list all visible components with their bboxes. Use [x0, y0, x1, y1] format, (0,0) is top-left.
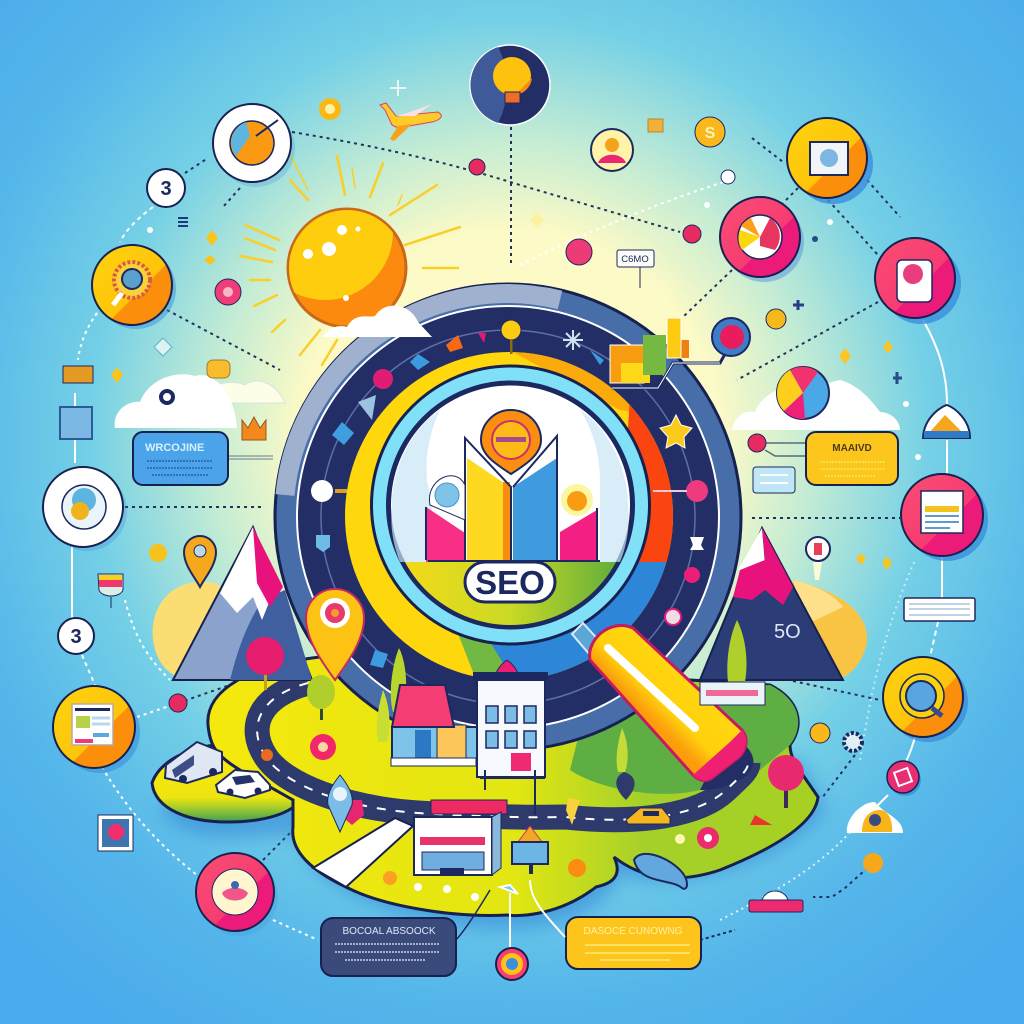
icon: globe circle — [43, 467, 127, 551]
icon: magnifier circle right — [883, 657, 968, 742]
white bar — [904, 598, 975, 621]
mountain right — [700, 528, 843, 680]
large yellow pin — [306, 589, 364, 680]
road end — [700, 745, 753, 790]
connector lines — [125, 127, 900, 897]
crown icon — [242, 417, 266, 440]
label: C6MO: C6MO — [621, 254, 649, 265]
tree lime left — [307, 675, 335, 720]
body — [414, 817, 492, 875]
store floor — [391, 758, 476, 766]
tower — [477, 680, 545, 777]
icon: pie circle — [720, 197, 804, 282]
tree pink left — [246, 637, 284, 690]
lens scene — [405, 409, 616, 625]
icon: card circle — [875, 238, 961, 324]
green shade — [570, 685, 798, 794]
road — [257, 683, 748, 820]
pink sign — [431, 800, 507, 814]
callout: navy — [321, 918, 456, 976]
lens outer — [372, 366, 650, 644]
flowers and road markers — [261, 734, 772, 901]
central tall building — [473, 660, 548, 815]
cloud under sun — [323, 306, 432, 337]
left cloud — [115, 360, 285, 428]
right cloud — [732, 380, 900, 430]
roof spire — [495, 660, 519, 680]
handle neck — [572, 623, 603, 655]
icon: coin S — [695, 117, 725, 147]
banner — [420, 837, 485, 845]
disc right pale — [793, 580, 843, 625]
yellow page — [467, 458, 503, 560]
callout: navy: BOCOAL ABSOOCK — [342, 926, 436, 937]
lower store — [414, 800, 507, 875]
store door — [415, 730, 431, 762]
pin on books — [481, 410, 541, 474]
store with awning — [391, 685, 477, 766]
trees — [246, 620, 804, 808]
orange stripe — [503, 482, 510, 560]
main island — [208, 657, 818, 916]
icon: coin S: S — [705, 125, 716, 142]
pin dash — [496, 437, 526, 442]
number badge 3 top: 3 — [160, 178, 172, 200]
shop windows — [422, 852, 484, 870]
small speech box — [748, 434, 795, 493]
lens rim — [388, 383, 632, 627]
door — [511, 753, 531, 771]
pink bar right — [560, 510, 597, 562]
icon: person badge — [591, 129, 633, 171]
small dome cloud — [847, 802, 903, 833]
small icon: tag — [63, 366, 93, 383]
dial track — [321, 330, 695, 704]
SEO pill: SEO — [475, 564, 545, 601]
icon: plane — [380, 103, 441, 141]
billboard — [512, 826, 548, 874]
dark tree — [616, 772, 635, 800]
icon: analytics circle — [213, 104, 295, 187]
bubble right centre — [567, 491, 587, 511]
pie chart — [777, 367, 829, 419]
icon: badge pink — [196, 853, 278, 936]
bubble left — [429, 476, 465, 520]
callout: blue: WRCOJINE — [145, 442, 204, 454]
small yellow pin — [184, 536, 216, 587]
outer ring — [275, 284, 741, 750]
number badge 3 top — [147, 169, 185, 207]
arrows to callouts — [456, 880, 735, 947]
chart target — [712, 318, 750, 356]
roof — [473, 672, 548, 680]
navy dial — [297, 306, 719, 728]
callout: yellow right — [765, 432, 898, 485]
pink tree right — [768, 755, 804, 808]
white side road — [313, 818, 413, 887]
pin centre — [492, 421, 530, 459]
pale sun discs behind mountains — [153, 580, 867, 680]
disc left — [153, 582, 240, 680]
store body — [392, 727, 477, 765]
small icon: square — [60, 407, 92, 439]
small bubble — [806, 537, 830, 580]
half dome — [923, 405, 970, 438]
tree cone 2 — [377, 690, 390, 742]
icon: gold dot — [319, 98, 341, 120]
small decor glyphs — [147, 202, 921, 460]
side — [492, 812, 501, 875]
big magnifier ring — [275, 284, 741, 750]
windows — [486, 706, 536, 748]
small dots and sparkles — [111, 80, 893, 873]
sun — [286, 208, 408, 328]
white fold left — [465, 438, 510, 562]
awning — [392, 685, 454, 727]
ring highlight — [285, 294, 560, 495]
icon: browser yellow — [53, 686, 140, 773]
van — [165, 742, 222, 783]
car white — [216, 770, 270, 798]
callout: yellow bottom: DASOCE CUNOWNG — [584, 926, 683, 937]
small square tag — [648, 119, 663, 132]
ground — [405, 562, 616, 625]
door — [440, 868, 464, 875]
coloured ring — [340, 350, 680, 690]
icon: bottom target — [496, 948, 528, 980]
icon: document pink — [901, 474, 988, 561]
dial markers — [311, 320, 708, 668]
blue fold — [513, 436, 557, 562]
left lobe — [152, 745, 305, 822]
island shadow — [160, 760, 825, 928]
icon: light bulb — [470, 45, 550, 125]
number badge 3 lower: 3 — [70, 626, 82, 648]
magnifier handle — [590, 626, 746, 781]
blue map pin — [328, 775, 352, 832]
islands — [152, 657, 818, 916]
tree cone 3 — [727, 620, 746, 682]
road marks — [257, 683, 748, 820]
sun rays — [240, 150, 460, 365]
white connector arcs — [72, 180, 947, 940]
mountain left — [173, 527, 312, 680]
icon: small pink badge — [887, 761, 921, 796]
bubble right — [561, 484, 593, 516]
icon: magnifier yellow — [92, 245, 176, 329]
bubble face — [435, 483, 459, 507]
label: C6MO — [617, 250, 654, 288]
store window — [437, 725, 466, 758]
bar chart — [610, 318, 730, 388]
mountain right: 5O — [774, 621, 801, 643]
small picture frame — [98, 815, 133, 851]
fence — [480, 770, 545, 815]
small flag icon — [98, 574, 123, 608]
water blob — [634, 854, 687, 889]
small road sign — [700, 682, 765, 705]
callout: blue — [133, 432, 273, 485]
lens tint — [391, 410, 629, 562]
blue page — [513, 458, 557, 560]
pink bar left — [426, 507, 465, 562]
tree cone 1 — [391, 648, 406, 712]
icon: laptop circle — [787, 118, 873, 204]
small dome pink — [749, 891, 803, 912]
callout: yellow right: MAAIVD — [832, 443, 872, 454]
yellow car — [626, 808, 670, 824]
disc right — [793, 580, 867, 680]
bar edges — [426, 436, 600, 561]
callout: yellow bottom — [566, 917, 701, 969]
tree cone 4 — [617, 728, 628, 772]
number badge 3 lower — [58, 618, 94, 654]
